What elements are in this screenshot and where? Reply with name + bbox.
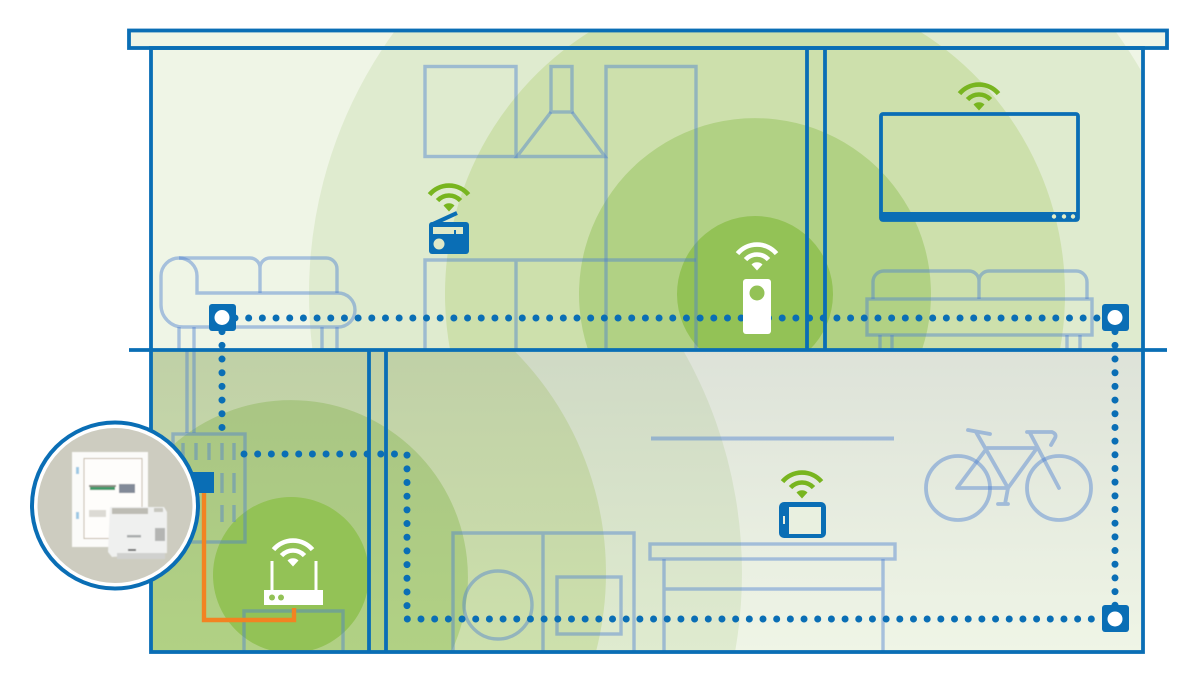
- socket: lower right: [1102, 605, 1129, 632]
- icon: radio: [429, 213, 469, 254]
- icon: television: [880, 114, 1079, 222]
- icon: wifi above router: [274, 541, 312, 566]
- furniture: kitchen: [425, 66, 696, 350]
- furniture: left sofa: [161, 258, 355, 350]
- furniture: right sofa: [867, 271, 1092, 350]
- furniture: desk: [650, 544, 895, 652]
- powerline: cabinet to lower socket dotted line: [244, 454, 1104, 619]
- icon: wifi above television: [960, 85, 998, 110]
- building walls: [129, 30, 1167, 652]
- powerline: left riser dotted line: [218, 318, 226, 432]
- upper floor wifi coverage: [130, 30, 1167, 350]
- furniture: router table: [244, 611, 343, 652]
- lower floor wifi coverage: [151, 350, 1143, 652]
- icon: tablet: [779, 502, 826, 538]
- socket: upper right: [1102, 304, 1129, 331]
- photo: distribution board: [72, 452, 148, 547]
- powerline: upper floor dotted line: [235, 314, 1104, 322]
- furniture: shelf: [651, 436, 894, 440]
- icon: router: [264, 561, 323, 605]
- furniture: riser pipe and fuse cabinet: [173, 350, 245, 542]
- callout: fuse box and adapter photo: [30, 420, 200, 590]
- icon: wifi above radio: [430, 186, 468, 212]
- icon: wifi above tablet: [782, 473, 822, 498]
- powerline: right riser dotted line: [1112, 318, 1118, 606]
- fuse cabinet powerline adapter: [192, 472, 214, 493]
- photo: powerline adapter: [108, 507, 167, 559]
- orange ethernet cable: [204, 490, 294, 620]
- furniture: washer and dryer: [453, 533, 634, 652]
- icon: wifi above repeater: [738, 245, 776, 270]
- icon: wifi repeater plug: [743, 279, 771, 334]
- icon: bicycle: [926, 430, 1091, 520]
- socket: upper left: [209, 304, 236, 331]
